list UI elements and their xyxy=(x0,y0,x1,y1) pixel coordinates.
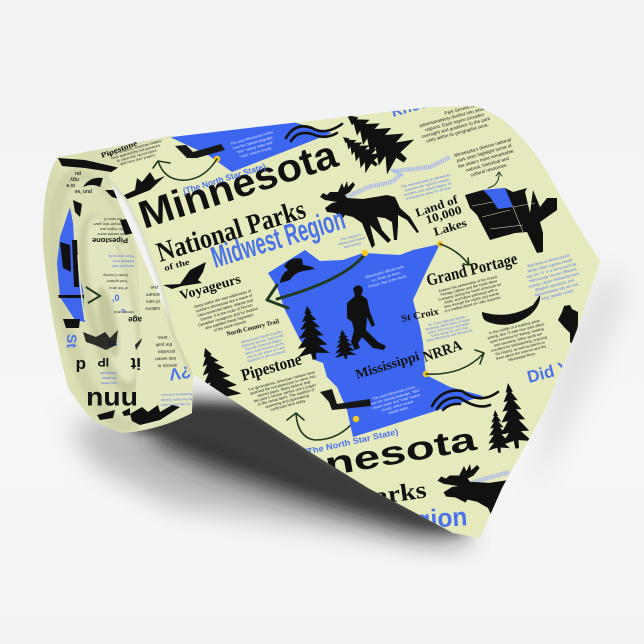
canoe paddlers silhouette xyxy=(124,172,165,199)
welcome paragraph: While other regions would xyxy=(527,257,573,274)
yellow dot north xyxy=(362,250,368,256)
white state caption: Minnesota's official motto xyxy=(365,265,405,279)
Grand Portage heading: Grand Portage xyxy=(424,249,520,290)
white caption lower xyxy=(368,384,425,419)
North Country Trail: North Country Trail xyxy=(226,318,280,338)
arrow Grand Portage xyxy=(440,244,469,265)
welcome paragraph: long, steady vowel. xyxy=(541,288,575,301)
arrow NRRA xyxy=(426,350,484,374)
welcome paragraph: say the "o" in a word such as xyxy=(526,261,577,279)
blue inner text: Pipes and rocks xyxy=(108,254,134,258)
black marks on crescent xyxy=(58,200,84,328)
cast shadow under tie xyxy=(70,265,625,545)
Voyageurs paragraph: Canadian voyageurs and fur traders xyxy=(197,306,258,328)
blue lower inner paragraph: Minnesota xyxy=(100,371,117,375)
diverse parks paragraph xyxy=(454,137,518,180)
blue trail paragraph: National Scenic Trail winds xyxy=(242,333,284,348)
small upside-down text on roll: ngy xyxy=(70,176,79,182)
white state caption: is L'Etoile du Nord, xyxy=(371,271,401,283)
blue lower paragraph: by the name Dakota xyxy=(161,397,192,402)
Voyageurs paragraph: Deep within the vast wilderness of xyxy=(194,288,252,309)
top right paragraph xyxy=(420,106,490,142)
welcome paragraph xyxy=(523,251,584,304)
small upside-down text on roll: pun 'se xyxy=(74,188,92,194)
text block above pipestone on roll: its sacred stone xyxy=(97,232,124,236)
St Croix paragraph xyxy=(423,314,474,343)
blue lower paragraph xyxy=(160,393,192,406)
Grand Portage paragraph: Company during the North American fur xyxy=(438,282,503,302)
second moose xyxy=(438,464,556,534)
Voyageurs paragraph: who paddled these highways xyxy=(204,312,254,330)
canoe xyxy=(482,295,540,325)
Midwest Region: Midwest Region xyxy=(207,203,349,275)
NRRA paragraph xyxy=(486,318,551,366)
upside-down paragraph on fold xyxy=(144,285,177,369)
waves upper xyxy=(286,124,342,141)
Land of 10,000 Lakes: 10,000 xyxy=(424,203,463,227)
blue lower paragraph: for sky-tinted water xyxy=(160,402,190,407)
upper yellow dot xyxy=(214,156,220,162)
upside-down paragraph on fold: of oars xyxy=(145,299,160,305)
blue trail paragraph: lakes and streams on the xyxy=(245,341,285,356)
text block above pipestone on roll xyxy=(93,217,124,236)
blue inner text: along the trail xyxy=(112,264,134,268)
upper white text xyxy=(230,131,274,158)
St Croix paragraph: links Minnesota and Wisconsin. xyxy=(427,328,474,343)
white state caption xyxy=(365,265,407,289)
Voyageurs paragraph: interconnected lakes, islands and xyxy=(197,297,254,318)
small Pipestone block on the top surface: Pipestone xyxy=(100,138,139,160)
white caption lower: from the Dakota language. "Mni" xyxy=(370,388,421,406)
yellow dots east xyxy=(423,241,443,377)
bottom tangle of silhouettes xyxy=(97,405,180,425)
blue paragraph east: wonders and cultural legacy for xyxy=(403,181,453,197)
blue question mark fragment: ?V xyxy=(167,362,192,384)
blue caption near dot: Minnesota's native xyxy=(338,236,366,246)
blue paragraph east: The national parks in Minnesota xyxy=(401,173,451,189)
small Pipestone block on the top surface: to carve into sacred pipes xyxy=(117,148,157,163)
blue paragraph east xyxy=(401,173,454,201)
NRRA paragraph: learn about the science and the xyxy=(496,344,547,361)
white caption lower: The word Minnesota comes xyxy=(372,385,416,401)
Pipestone paragraph: continues here today. xyxy=(270,398,307,412)
upside-down paragraph on fold: the park xyxy=(155,342,172,348)
trees lower right xyxy=(484,381,533,454)
small inner black text: of the land xyxy=(109,286,128,291)
North star state: (The North Star State) xyxy=(182,161,267,196)
text block above pipestone on roll: the land of xyxy=(103,217,122,221)
Voyageurs paragraph: of the North Woods. xyxy=(213,319,248,333)
blue trail paragraph: Superior in the northeast. xyxy=(247,349,287,364)
black it fragment: it xyxy=(130,354,141,373)
river hatch xyxy=(347,157,450,197)
top right paragraph: administratively divided into seven xyxy=(419,105,488,128)
blue trail paragraph: through forested ridges, xyxy=(245,338,283,352)
Pipestone paragraph: For generations, American Indians have xyxy=(248,369,315,392)
black IP fragment: IP xyxy=(98,355,109,369)
Land of 10,000 Lakes: Land of xyxy=(413,192,461,220)
St Croix paragraph: water, wild shores and quiet xyxy=(428,322,469,335)
blue 10,0 letters: ,0 xyxy=(112,293,120,303)
Grand Portage paragraph: Portage Ojibwe and the North West xyxy=(440,279,497,297)
small Pipestone block on the top surface: For generations, American Indians xyxy=(108,139,162,157)
NRRA paragraph: excellent for birdwatching, enjoying xyxy=(491,335,547,353)
NRRA paragraph: setting, this 72-mile river park offers xyxy=(487,322,545,340)
small Pipestone block on the top surface: and carry their prayers xyxy=(120,153,156,166)
upside-down paragraph on fold: service is xyxy=(157,363,177,369)
Voyageurs paragraph xyxy=(192,288,261,337)
Pipestone paragraph: to the Great Spirit. The tradition of xyxy=(257,387,316,407)
NRRA paragraph: the history, as well as places to xyxy=(495,340,545,356)
blue caption near dot: One moose is xyxy=(340,232,362,242)
lower arrow xyxy=(287,413,356,440)
blue n fragment: n xyxy=(121,308,125,315)
rolled end of the tie xyxy=(42,135,193,433)
upper white text: "Mni" means water and xyxy=(236,141,273,155)
second Minnesota title: nesota xyxy=(322,420,480,483)
upside-down paragraph on fold: pue xyxy=(150,285,158,290)
upside-down paragraph on fold: into seven xyxy=(155,356,176,362)
NRRA: NRRA xyxy=(421,338,464,366)
fold shading along front edge xyxy=(107,175,193,374)
small inner black text: Trail system xyxy=(106,279,128,284)
text block above pipestone on roll: the region and xyxy=(100,227,124,231)
St Croix paragraph: Riverway offers miles of clean xyxy=(425,318,470,332)
Grand Portage paragraph xyxy=(436,274,506,314)
second star line: (The North Star State) xyxy=(303,426,399,457)
blue St fragment: St xyxy=(64,334,80,348)
blue caption near dot: land animal. xyxy=(343,241,362,249)
blue lower inner paragraph: has lakes xyxy=(102,376,117,380)
upper blue state fragment xyxy=(170,122,332,172)
Grand Portage paragraph: Explore the partnership of the Grand xyxy=(438,275,497,293)
St Croix paragraph: St. Croix National Scenic xyxy=(428,315,466,327)
black d fragment: d xyxy=(76,356,86,375)
top right paragraph: regions. Each region provides xyxy=(424,112,485,132)
upper arrow xyxy=(153,159,217,180)
blue lower inner paragraph xyxy=(100,371,117,385)
St Croix paragraph: forest along the river that xyxy=(431,326,468,338)
diverse parks paragraph: the state's most remarkable xyxy=(457,148,514,169)
second hatch xyxy=(473,472,510,482)
Pipestone paragraph xyxy=(248,369,322,416)
pale band on crescent xyxy=(78,255,85,320)
Pipestone heading: Pipestone xyxy=(239,349,304,385)
diverse parks paragraph: park sites highlight some of xyxy=(456,143,513,163)
small Pipestone block on the top surface xyxy=(100,138,165,169)
trees top xyxy=(343,116,414,174)
NRRA paragraph: In the middle of a bustling urban xyxy=(489,319,541,335)
text block above pipestone on roll: people who gave xyxy=(93,222,122,226)
small inner black text: North Country xyxy=(103,273,128,278)
blue id fragment: il xyxy=(105,340,119,347)
upside-down paragraph on fold: : area. xyxy=(157,335,170,340)
person walking xyxy=(347,285,386,350)
tree left xyxy=(187,342,243,411)
large upside-down letters: nnu xyxy=(86,386,138,416)
upside-down paragraph on fold: stream xyxy=(146,292,160,297)
small inner black text: stream and xyxy=(114,310,134,315)
small upside-down text on roll xyxy=(66,170,92,194)
of the: of the xyxy=(163,256,191,273)
welcome paragraph: "Minnesota" as two different xyxy=(528,266,578,284)
Voyageurs heading: Voyageurs xyxy=(178,271,242,303)
Midwest map xyxy=(465,188,557,253)
Voyageurs paragraph: northern Minnesota lies a maze of xyxy=(195,292,254,314)
canoe highlight xyxy=(492,303,528,312)
yellow dot lower xyxy=(353,416,359,422)
white state caption: French: Star of the North xyxy=(368,274,407,289)
NRRA paragraph: and canoeing. Other spots are xyxy=(493,332,543,348)
Mississippi: Mississippi xyxy=(353,348,421,382)
small upside-down text on roll: pu xyxy=(75,170,81,176)
Did You: Did Y xyxy=(525,357,572,387)
National Parks heading: National Parks xyxy=(153,194,309,269)
diverse parks paragraph: cultural resources. xyxy=(470,162,508,178)
horseman xyxy=(558,305,578,345)
upper white text: The word Minnesota comes xyxy=(230,130,274,146)
dark silhouettes at top of roll xyxy=(58,158,132,235)
Pipestone paragraph: the pipe's smoke carries one's prayer xyxy=(253,382,317,403)
centre arrow xyxy=(267,254,365,308)
arrow to map xyxy=(488,172,502,188)
trees in state xyxy=(291,304,357,362)
Voyageurs paragraph: forests. It is the route of French xyxy=(200,302,253,322)
NRRA paragraph: Mississippi River. xyxy=(508,352,536,362)
pipe upper xyxy=(175,144,225,158)
small inner black text xyxy=(103,273,134,315)
upside-down paragraph on fold: provides xyxy=(157,349,175,355)
welcome paragraph: Welcome to Minnesotah! xyxy=(527,252,570,269)
inner green chevron xyxy=(86,287,100,303)
St Croix: St Croix xyxy=(400,306,440,325)
upper white text: from the Dakota language. xyxy=(232,135,274,151)
white caption lower: cloudy water. xyxy=(388,406,409,415)
tie front panel xyxy=(107,93,600,538)
blue trail paragraph: Minnesota's North Country xyxy=(241,330,283,344)
top right paragraph: Park Service is xyxy=(444,103,475,116)
Grand Portage paragraph: trade, and follow pathways with a xyxy=(444,288,499,305)
Pipestone paragraph: quarried the red pipestone to carve into xyxy=(249,373,316,396)
pages layer on the right of the roll xyxy=(134,239,192,430)
top right paragraph: oversight and guidance to the park xyxy=(421,116,491,139)
blue paragraph east: everyone to enjoy for all time. xyxy=(406,186,452,201)
black age fragment: age xyxy=(128,315,142,324)
small upside-down text on roll: ıo ɐ xyxy=(66,182,75,188)
blue paragraph east: preserve the region's natural xyxy=(404,178,449,193)
roll inner shading rings xyxy=(50,169,140,430)
white caption lower: means water and "sota" means xyxy=(372,393,421,410)
pipe lower xyxy=(320,389,371,410)
Pipestone paragraph: quarrying and pipemaking xyxy=(265,393,309,409)
blue lower inner paragraph: and rivers xyxy=(101,381,117,385)
blue trail paragraph xyxy=(240,329,288,364)
Minnesota title: Minnesota xyxy=(133,133,343,238)
second National Parks: Parks xyxy=(355,477,428,513)
Land of 10,000 Lakes xyxy=(413,192,469,239)
NRRA paragraph: quiet stretches for fishing, boating xyxy=(490,327,544,344)
inner tangle of silhouettes xyxy=(83,330,142,350)
Know heading: Know xyxy=(389,93,434,121)
blue caption near dot xyxy=(337,232,367,251)
Minnesota on map xyxy=(483,188,513,209)
welcome paragraph: vowels, Upper Midwesterners xyxy=(528,271,580,289)
white caption lower: cloudy, which means xyxy=(381,399,414,412)
upside down Pipestone: Pipestone xyxy=(92,236,128,245)
blue trail paragraph: way to the shore of Lake xyxy=(246,345,285,359)
hat xyxy=(280,258,315,283)
waves lower xyxy=(432,391,498,410)
moose xyxy=(320,181,419,248)
Pipestone paragraph: sacred pipes. Many believe that xyxy=(257,379,312,398)
map state dividers xyxy=(472,195,535,232)
Grand Portage paragraph: time through the nights and events xyxy=(444,292,500,309)
eagle xyxy=(163,262,206,289)
small Pipestone block on the top surface: have quarried the red pipestone xyxy=(111,143,161,160)
main state shape xyxy=(268,244,483,437)
welcome paragraph: (English speakers, esp. xyxy=(534,277,576,292)
Grand Portage paragraph: of a trading depot on Lake Superior. xyxy=(444,295,502,313)
welcome paragraph: Minnesotans) say as one xyxy=(534,281,579,298)
diverse parks paragraph: natural, historical and xyxy=(465,156,510,173)
top right paragraph: units within its geographic area. xyxy=(426,122,489,144)
Land of 10,000 Lakes: Lakes xyxy=(432,215,469,239)
blue crescent xyxy=(57,207,85,322)
upper white text: "sota" means cloudy. xyxy=(239,146,272,159)
blue lower paragraph: Minnesota is known xyxy=(161,392,192,397)
blue inner text xyxy=(108,254,134,268)
upside-down paragraph on fold: nations xyxy=(144,306,160,312)
diverse parks paragraph: Minnesota's diverse national xyxy=(454,137,512,158)
blue inner text: National river xyxy=(112,259,134,263)
second Midwest Region: Region xyxy=(383,501,468,537)
